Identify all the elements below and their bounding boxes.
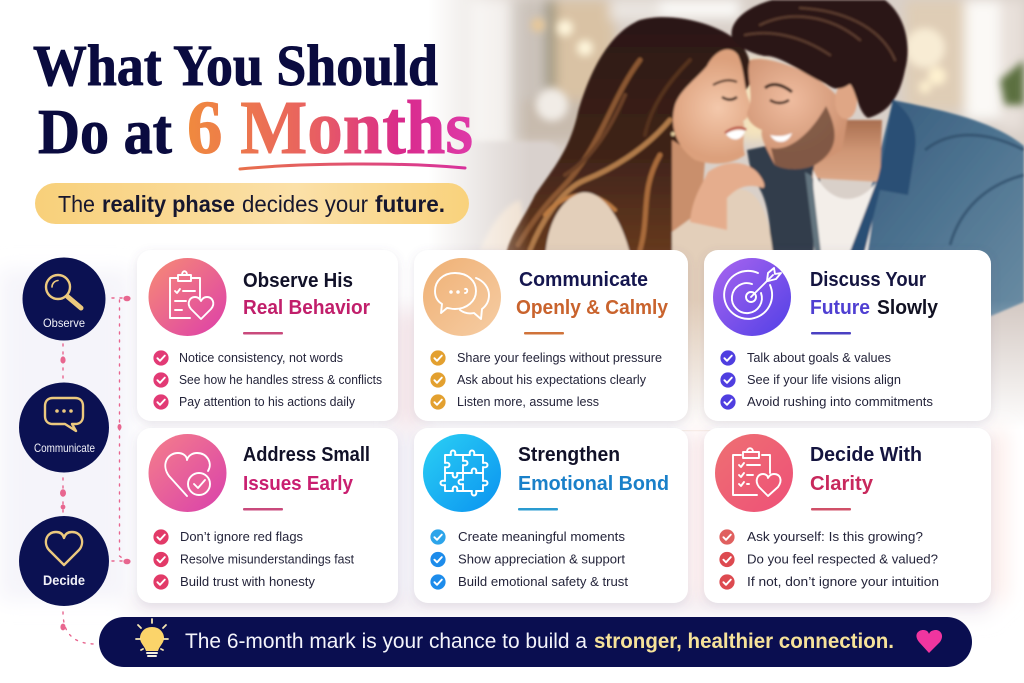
step: Communicate (19, 382, 109, 472)
checklist: See how he handles stress & conflicts (179, 372, 382, 387)
checklist (720, 350, 933, 410)
checklist (430, 350, 662, 410)
checklist: Share your feelings without pressure (457, 350, 662, 365)
title: What You Should (33, 33, 438, 98)
step: Decide (19, 516, 109, 606)
subtitle pill: decides your (242, 191, 368, 217)
dotted connectors (60, 296, 131, 644)
checklist (153, 350, 382, 410)
callout bar (99, 617, 972, 667)
checklist: Ask about his expectations clearly (457, 372, 646, 387)
soft background wash (0, 270, 1004, 614)
panel: Communicate Openly & Calmly: Openly & Calmly (516, 297, 669, 319)
panel: Address Small Issues Early (137, 428, 398, 603)
woman's neck (672, 140, 705, 232)
title (33, 33, 473, 170)
panel: Discuss Your Future Slowly: Slowly (877, 297, 939, 319)
icon: magnifying glass (46, 275, 81, 308)
panel: Decide With Clarity: Decide With (810, 444, 922, 466)
panel: Decide With Clarity (704, 428, 991, 603)
checklist: Build emotional safety & trust (458, 574, 628, 589)
icon: puzzle pieces (423, 434, 501, 512)
checklist: Avoid rushing into commitments (747, 394, 933, 409)
man's face (747, 59, 850, 169)
woman's hand (690, 163, 764, 230)
panel: Observe His Real Behavior: Observe His (243, 270, 353, 292)
checklist: Show appreciation & support (458, 552, 625, 566)
panel: Discuss Your Future Slowly: Future (810, 297, 870, 319)
panel: Strengthen Emotional Bond (414, 428, 688, 603)
woman's hair (505, 17, 751, 262)
callout bar: The 6-month mark is your chance to build a (185, 630, 587, 653)
checklist: Pay attention to his actions daily (179, 394, 355, 409)
background photo: couple touching noses (400, 0, 1024, 430)
icon: heart with check (148, 434, 226, 512)
checklist: Do you feel respected & valued? (747, 552, 938, 566)
checklist: Ask yourself: Is this growing? (747, 529, 923, 544)
subtitle pill: future. (375, 191, 445, 217)
title: Do at (38, 96, 173, 167)
man's neck and t-shirt (812, 120, 882, 182)
woman's face (673, 49, 750, 164)
panel: Strengthen Emotional Bond: Emotional Bond (518, 473, 669, 495)
man's jacket (747, 140, 820, 262)
checklist: Don’t ignore red flags (180, 529, 303, 544)
man's hair (732, 0, 908, 118)
panel: Address Small Issues Early: Issues Early (243, 473, 354, 495)
step: Observe: Observe (43, 316, 85, 330)
panel: Observe His Real Behavior (137, 250, 398, 421)
woman's sweater (545, 192, 632, 262)
checklist: Build trust with honesty (180, 574, 315, 589)
checklist (430, 529, 628, 590)
icon: checklist clipboard with heart (715, 434, 793, 512)
photo fade overlays (395, 0, 1024, 440)
icon: clipboard with heart (148, 258, 226, 336)
panel: Decide With Clarity: Clarity (810, 473, 874, 495)
icon: pink heart (916, 630, 942, 653)
icon: chat bubble (45, 398, 83, 431)
checklist: Notice consistency, not words (179, 350, 343, 365)
checklist (153, 529, 354, 590)
checklist (719, 529, 939, 590)
icon: heart outline (46, 532, 82, 565)
checklist: Resolve misunderstandings fast (180, 552, 354, 566)
icon: light bulb (136, 619, 168, 656)
subtitle pill: The (58, 191, 95, 217)
checklist: Create meaningful moments (458, 529, 625, 544)
icon: speech bubbles (423, 258, 501, 336)
checklist: Talk about goals & values (747, 350, 891, 365)
checklist: Listen more, assume less (457, 394, 599, 409)
step: Observe (22, 258, 106, 340)
subtitle pill: reality phase (102, 191, 235, 217)
panel: Communicate Openly & Calmly: Communicate (519, 269, 648, 291)
panel: Discuss Your Future Slowly: Discuss Your (810, 269, 926, 291)
panel: Communicate Openly & Calmly (414, 250, 688, 421)
step: Communicate: Communicate (34, 441, 95, 455)
panel: Strengthen Emotional Bond: Strengthen (518, 444, 620, 466)
checklist: If not, don’t ignore your intuition (747, 574, 939, 589)
subtitle pill (35, 183, 469, 224)
title: 6 Months (187, 86, 473, 170)
panel: Address Small Issues Early: Address Small (243, 444, 370, 466)
icon: target with arrow (713, 258, 791, 336)
checklist: See if your life visions align (747, 372, 901, 387)
panel: Observe His Real Behavior: Real Behavior (243, 297, 370, 319)
step: Decide: Decide (43, 572, 85, 588)
callout bar: stronger, healthier connection. (594, 630, 894, 653)
panel: Discuss Your Future Slowly (704, 250, 991, 421)
